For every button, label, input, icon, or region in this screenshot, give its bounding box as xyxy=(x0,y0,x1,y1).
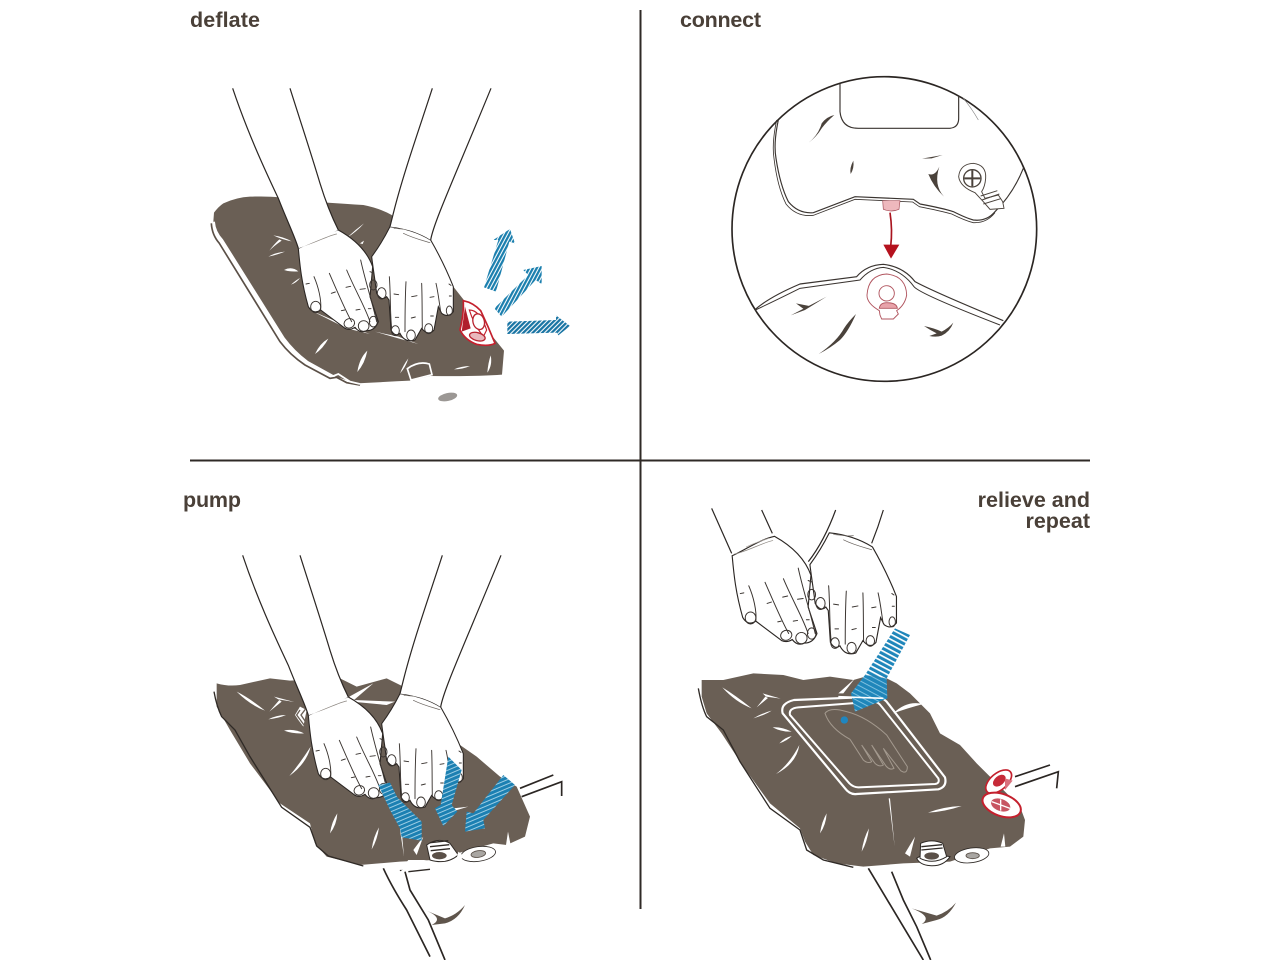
handprint mark on pad xyxy=(825,710,907,772)
red arrow xyxy=(883,213,899,259)
bottom ports xyxy=(868,841,990,870)
bag xyxy=(214,678,530,872)
heading: deflate: deflate xyxy=(190,8,260,32)
red receiver ring xyxy=(867,274,907,319)
lifted hands xyxy=(732,533,896,654)
red open valves xyxy=(979,765,1024,822)
tubes xyxy=(868,765,1058,960)
bag port xyxy=(407,363,432,380)
bag xyxy=(698,673,1025,867)
heading: connect: connect xyxy=(680,8,761,32)
red open valve xyxy=(460,301,495,345)
hands pressing xyxy=(233,88,491,341)
ports xyxy=(400,840,497,870)
panel: deflate illustration xyxy=(211,88,570,403)
heading: relieve and repeat: repeat xyxy=(1025,509,1090,533)
pink stud xyxy=(883,201,900,211)
air mark below bag xyxy=(437,391,458,403)
wrinkle marks xyxy=(791,115,953,354)
closed valve xyxy=(959,163,1004,209)
blue hatched arrows: air out xyxy=(484,229,570,335)
arms xyxy=(712,508,883,562)
lower bag edge xyxy=(755,264,1003,325)
panel: relieve and repeat illustration xyxy=(698,508,1058,960)
tubes xyxy=(383,775,562,960)
blue hatched arrows: pump xyxy=(378,757,515,841)
heading: pump: pump xyxy=(183,488,241,512)
panel: connect illustration xyxy=(732,77,1037,381)
panel: pump illustration xyxy=(214,555,562,960)
pressure pad outline xyxy=(782,697,945,794)
deflated bag xyxy=(211,196,504,385)
upper bag corner xyxy=(773,84,1023,223)
circle frame xyxy=(732,77,1037,381)
hands pressing xyxy=(243,555,501,808)
heading: relieve and repeat: relieve and xyxy=(978,488,1090,512)
blue hatched arrow: air in xyxy=(838,628,910,724)
